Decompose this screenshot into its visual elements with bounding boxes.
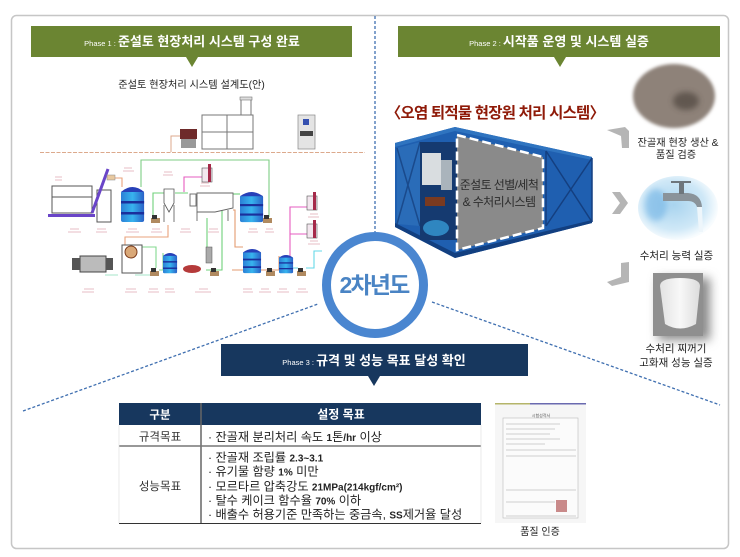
divider: left dashed bbox=[23, 304, 318, 411]
table: targets bbox=[119, 403, 481, 524]
icon: control panel bbox=[298, 115, 315, 149]
icon: generator bbox=[171, 97, 253, 152]
icon: compressor bbox=[183, 247, 212, 273]
text box: system label bbox=[457, 135, 543, 250]
icon: cyclone bbox=[164, 189, 174, 222]
chart: process flow diagram bbox=[40, 97, 365, 292]
photo: water tap bbox=[638, 176, 718, 240]
arrow: bottom chevron bbox=[607, 262, 629, 286]
photo: solidified cylinder bbox=[653, 273, 710, 340]
heading: system name: 〈오염 퇴적물 현장원 처리 시스템〉 bbox=[386, 104, 604, 122]
illustration: container unit bbox=[395, 127, 592, 258]
document: quality certificate: 시험성적서 bbox=[532, 412, 551, 418]
caption: cylinder: 고화재 성능 실증 bbox=[639, 357, 713, 369]
caption: cylinder: 수처리 찌꺼기 bbox=[646, 343, 706, 355]
table: targets: 규격목표 bbox=[139, 430, 181, 444]
text box: system label: & 수처리시스템 bbox=[463, 195, 535, 209]
badge: year 2 bbox=[326, 236, 424, 334]
icon: filter press bbox=[72, 256, 113, 272]
table: targets: · 탈수 케이크 함수율 70% 이하 bbox=[208, 494, 361, 508]
arrow: top chevron bbox=[607, 127, 629, 148]
table: targets: · 잔골재 분리처리 속도 1톤/hr 이상 bbox=[208, 430, 382, 444]
table: targets: · 잔골재 조립률 2.3~3.1 bbox=[208, 450, 324, 464]
panel: phase 2 heading bbox=[398, 26, 720, 67]
document: quality certificate bbox=[495, 403, 586, 523]
table: targets: 성능목표 bbox=[139, 480, 181, 493]
icon: settling tank bbox=[190, 193, 233, 221]
table: targets: 구분 bbox=[149, 408, 171, 422]
panel: phase 2 heading: Phase 2 : 시작품 운영 및 시스템 실증 bbox=[469, 34, 649, 49]
drawing labels bbox=[55, 168, 320, 292]
caption: certificate: 품질 인증 bbox=[520, 526, 560, 538]
caption: sand: 잔골재 현장 생산 & bbox=[638, 137, 719, 149]
badge: year 2: 2차년도 bbox=[339, 272, 410, 298]
panel: phase 3 heading: Phase 3 : 규격 및 성능 목표 달성 확인 bbox=[282, 353, 466, 368]
table: targets: 설정 목표 bbox=[317, 408, 365, 422]
panel: phase 3 heading bbox=[221, 344, 528, 386]
panel: phase 1 heading: Phase 1 : 준설토 현장처리 시스템 구성 완료 bbox=[84, 34, 300, 49]
icon: dryer bbox=[122, 245, 142, 273]
photo: sand bbox=[633, 64, 715, 128]
icon: screw hopper bbox=[48, 169, 115, 222]
divider: vertical dashed bbox=[374, 16, 376, 232]
text box: system label: 준설토 선별/세척 bbox=[460, 178, 538, 192]
divider: right dashed bbox=[432, 302, 720, 405]
table: targets: · 유기물 함량 1% 미만 bbox=[208, 464, 319, 478]
table: targets: · 모르타르 압축강도 21MPa(214kgf/cm²) bbox=[208, 480, 403, 494]
caption: water: 수처리 능력 실증 bbox=[640, 250, 714, 262]
caption: sand: 품질 검증 bbox=[656, 149, 696, 161]
panel: phase 1 heading bbox=[31, 26, 352, 67]
table: targets: · 배출수 허용기준 만족하는 중금속, SS제거율 달성 bbox=[208, 508, 462, 522]
pipes bbox=[105, 160, 322, 275]
text: design drawing title: 준설토 현장처리 시스템 설계도(안) bbox=[118, 79, 265, 91]
arrow: middle chevron bbox=[612, 192, 628, 214]
